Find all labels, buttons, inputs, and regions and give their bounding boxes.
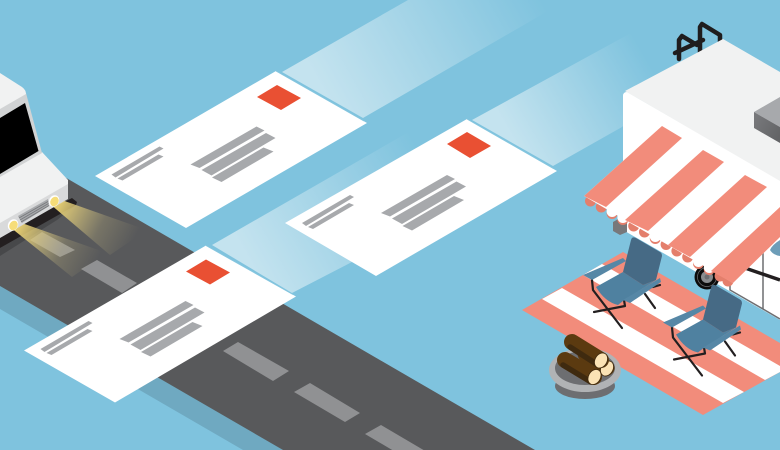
chair right arm (623, 278, 661, 303)
awning scallops (585, 196, 734, 286)
chair back (623, 237, 662, 285)
building roof (625, 39, 780, 181)
awning scallop highlights (607, 206, 715, 273)
headlight beams (10, 198, 147, 277)
awning post (613, 218, 627, 235)
awning canopy (584, 126, 780, 283)
road dashes (30, 232, 432, 450)
window bar (745, 268, 780, 280)
stamp (186, 260, 230, 284)
envelope 1 (95, 71, 367, 228)
stamp (257, 85, 301, 110)
stamp (447, 132, 491, 158)
chair 2 (663, 285, 742, 376)
window frame (730, 250, 780, 319)
wheel (694, 264, 720, 290)
chair legs (672, 328, 740, 376)
return address lines (40, 321, 92, 355)
top log (570, 342, 610, 370)
chair 1 (583, 237, 662, 328)
building (613, 39, 780, 320)
rug (522, 252, 780, 415)
chair seat (596, 272, 656, 305)
light beam behind envelope 2 (472, 28, 690, 166)
chair left arm (583, 258, 626, 280)
chair back (703, 285, 742, 332)
address lines (190, 126, 276, 182)
light beam behind envelope 1 (282, 0, 567, 118)
awning (584, 126, 780, 286)
light beam behind envelope 3 (212, 114, 530, 293)
building wall (623, 92, 780, 320)
van windshield (0, 103, 38, 174)
logs (563, 342, 616, 387)
blue chair behind window (770, 240, 780, 256)
van headlights (6, 193, 61, 233)
lower log (563, 360, 604, 387)
chair seat (676, 320, 736, 352)
roof rack (675, 24, 720, 59)
chair legs (592, 280, 660, 328)
chair right arm (703, 326, 741, 350)
envelope 2 (285, 119, 557, 276)
return address lines (112, 146, 164, 180)
road (0, 140, 535, 450)
van hood (0, 152, 68, 223)
envelope 3 (24, 246, 296, 402)
van body front (0, 182, 68, 238)
van (0, 73, 68, 238)
road shadow (0, 286, 283, 450)
van shadow (0, 198, 77, 256)
van roof (0, 73, 26, 109)
address lines (381, 175, 466, 230)
chair left arm (663, 306, 706, 328)
roof vent (754, 97, 780, 143)
rug stripes (542, 264, 780, 403)
awning stripes (584, 126, 780, 283)
log bowl (549, 348, 621, 399)
address lines (120, 301, 204, 356)
van windshield frame (0, 93, 42, 177)
return address lines (302, 195, 354, 229)
van grille (18, 199, 49, 223)
back log (585, 354, 616, 378)
